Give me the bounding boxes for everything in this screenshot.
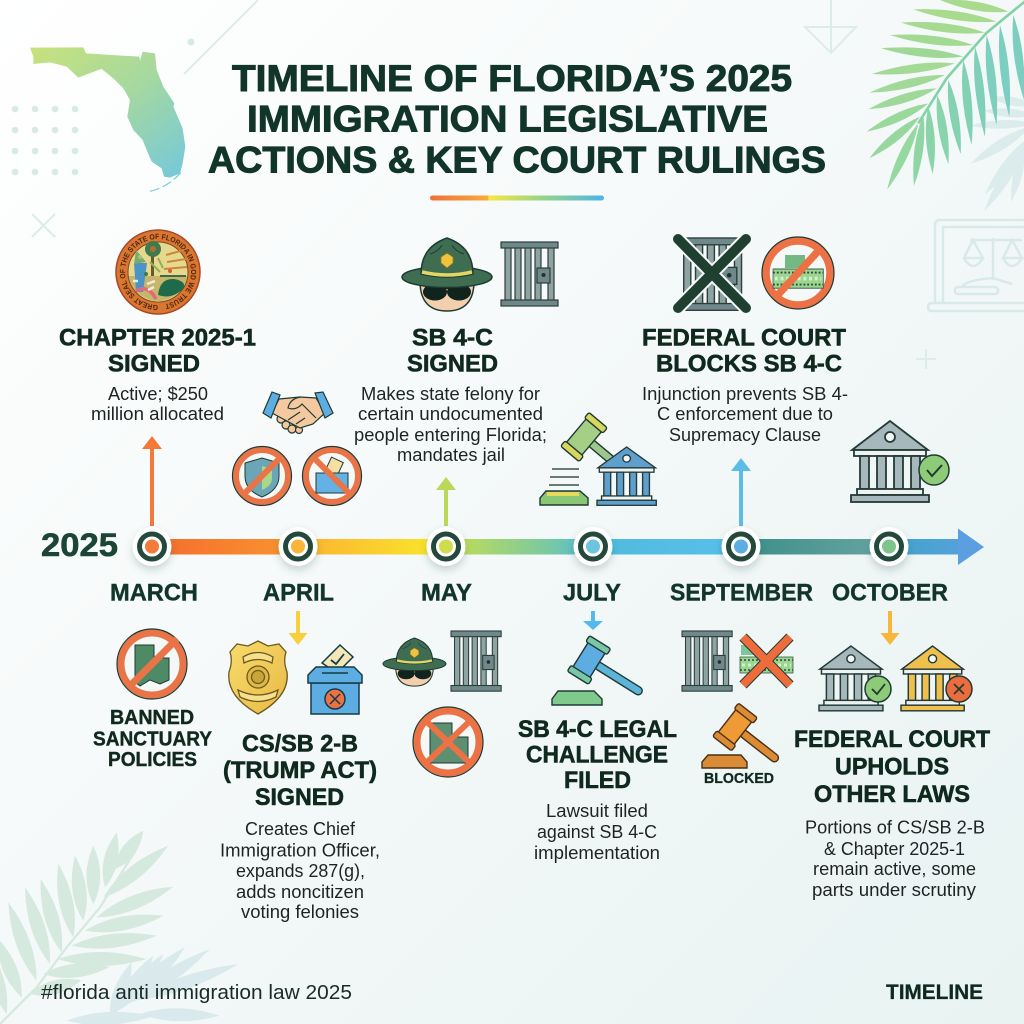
panel: March below the line <box>93 629 213 771</box>
node: October <box>870 527 908 566</box>
description: adds noncitizen <box>236 881 364 902</box>
heading: SIGNED <box>255 784 344 811</box>
heading: SIGNED <box>407 350 498 378</box>
title <box>208 58 826 180</box>
panel: March above the line <box>59 229 256 526</box>
heading <box>59 324 256 378</box>
icon: blue courthouse <box>597 447 656 505</box>
month labels: JULY <box>563 580 621 606</box>
palm: top right faded <box>968 93 1024 214</box>
panel: May below the line <box>383 631 501 777</box>
arrow <box>288 611 308 645</box>
icon: laptop with scales of justice <box>928 220 1024 311</box>
title rule <box>430 196 604 200</box>
icon: handshake <box>263 392 333 434</box>
description: implementation <box>534 842 660 863</box>
arrow <box>142 436 162 526</box>
icon: no voting <box>302 446 362 506</box>
heading: SB 4-C <box>412 324 493 352</box>
icon: jail bars <box>682 631 732 691</box>
heading: SB 4-C LEGAL <box>518 716 677 743</box>
label: BANNED <box>110 707 194 729</box>
description: parts under scrutiny <box>812 879 977 900</box>
description: Lawsuit filed <box>546 800 648 821</box>
description: & Chapter 2025-1 <box>824 838 965 859</box>
month labels: APRIL <box>263 580 334 606</box>
description: remain active, some <box>813 858 976 879</box>
description: Injunction prevents SB 4- <box>642 383 848 404</box>
panel: July above the line <box>540 412 656 505</box>
label: POLICIES <box>108 749 197 771</box>
icon: courthouse upheld <box>819 646 891 711</box>
month labels: OCTOBER <box>832 580 948 606</box>
heading: SIGNED <box>108 350 200 378</box>
palm: bottom left faded <box>66 943 241 1024</box>
month labels: SEPTEMBER <box>670 580 813 606</box>
icon: gavel <box>552 636 653 711</box>
heading: BLOCKS SB 4-C <box>656 350 842 378</box>
title: IMMIGRATION LEGISLATIVE <box>247 98 768 140</box>
icon: state seal: GREAT SEAL OF THE STATE OF FLORIDA IN GOD WE TRUST <box>120 234 196 310</box>
description: Makes state felony for <box>361 383 540 404</box>
icon: crossed-out jail <box>678 238 746 310</box>
icon: jail bars <box>501 242 558 306</box>
heading: UPHOLDS <box>835 754 949 780</box>
heading <box>794 726 990 808</box>
heading: FEDERAL COURT <box>642 324 846 352</box>
icon: crossed-out map <box>413 707 483 777</box>
icon: gavel over base <box>540 412 633 505</box>
description: people entering Florida; <box>354 424 547 445</box>
description: Immigration Officer, <box>220 840 380 860</box>
node: March <box>132 527 172 566</box>
panel: May above the line <box>354 238 558 526</box>
description <box>220 818 380 922</box>
timeline bar with arrow <box>150 528 984 565</box>
arrow <box>731 458 751 526</box>
heading: CS/SB 2-B <box>242 730 358 758</box>
heading: FEDERAL COURT <box>794 726 990 753</box>
description: mandates jail <box>397 444 505 465</box>
icon: Florida map <box>30 47 185 191</box>
node: May <box>426 527 466 566</box>
icon: small ranger hat <box>383 638 446 686</box>
panel: September above the line <box>642 237 848 526</box>
icon: jail bars <box>451 631 501 691</box>
icon: courthouse struck <box>901 646 972 711</box>
icon: gold badge <box>229 641 287 714</box>
month labels: MAY <box>421 580 472 606</box>
arrow <box>583 611 603 630</box>
icon: ballot box <box>308 645 362 714</box>
heading <box>518 716 677 794</box>
arrow <box>436 477 456 526</box>
footer label: TIMELINE <box>886 981 983 1004</box>
panel: July below the line <box>518 611 677 863</box>
heading: CHALLENGE <box>526 742 668 768</box>
title: TIMELINE OF FLORIDA’S 2025 <box>232 58 792 99</box>
heading: FILED <box>564 767 631 794</box>
heading <box>407 324 498 378</box>
icon: ranger hat officer <box>402 238 492 311</box>
title: ACTIONS & KEY COURT RULINGS <box>208 140 826 180</box>
panel: April below the line <box>220 611 380 922</box>
description <box>91 383 224 424</box>
description: certain undocumented <box>358 403 543 424</box>
icon: check badge <box>919 455 949 485</box>
description: against SB 4-C <box>537 821 657 842</box>
icon: no shield <box>232 446 292 506</box>
label: BLOCKED <box>704 771 774 787</box>
icon: no border wall <box>762 237 834 309</box>
month labels <box>110 580 948 606</box>
panel: October above the line <box>851 421 949 502</box>
description: million allocated <box>91 403 224 424</box>
description <box>534 800 660 863</box>
description: Supremacy Clause <box>669 424 821 445</box>
palm: bottom left <box>0 827 176 1024</box>
arrow <box>880 611 900 645</box>
timeline <box>41 527 984 606</box>
heading <box>223 730 377 811</box>
label <box>93 707 213 771</box>
description: voting felonies <box>241 901 359 922</box>
heading: OTHER LAWS <box>814 781 970 808</box>
icon: no sanctuary <box>117 629 187 699</box>
icon: courthouse with check <box>851 421 929 502</box>
description <box>805 816 985 900</box>
heading: (TRUMP ACT) <box>223 757 377 784</box>
panel: September below the line <box>682 631 793 787</box>
panel: October below the line <box>794 611 990 900</box>
description <box>642 383 848 445</box>
description: expands 287(g), <box>236 860 365 881</box>
label: SANCTUARY <box>93 728 213 750</box>
footer hashtag: #florida anti immigration law 2025 <box>41 982 352 1004</box>
year label: 2025 <box>41 527 118 563</box>
description <box>354 383 547 465</box>
decorative background shapes <box>12 0 936 369</box>
heading <box>642 324 846 378</box>
heading: CHAPTER 2025-1 <box>59 324 256 352</box>
node: September <box>722 527 760 566</box>
description: Creates Chief <box>245 818 356 839</box>
description: Portions of CS/SB 2-B <box>805 816 985 838</box>
month labels: MARCH <box>110 580 198 606</box>
description: Active; $250 <box>108 383 208 404</box>
icon: crossed-out wire <box>740 637 793 685</box>
node: April <box>278 527 318 566</box>
palm: top right <box>865 0 1024 191</box>
description: C enforcement due to <box>657 403 833 424</box>
panel: April above the line <box>232 392 362 506</box>
icon: orange gavel <box>702 703 790 777</box>
node: July <box>574 527 612 566</box>
